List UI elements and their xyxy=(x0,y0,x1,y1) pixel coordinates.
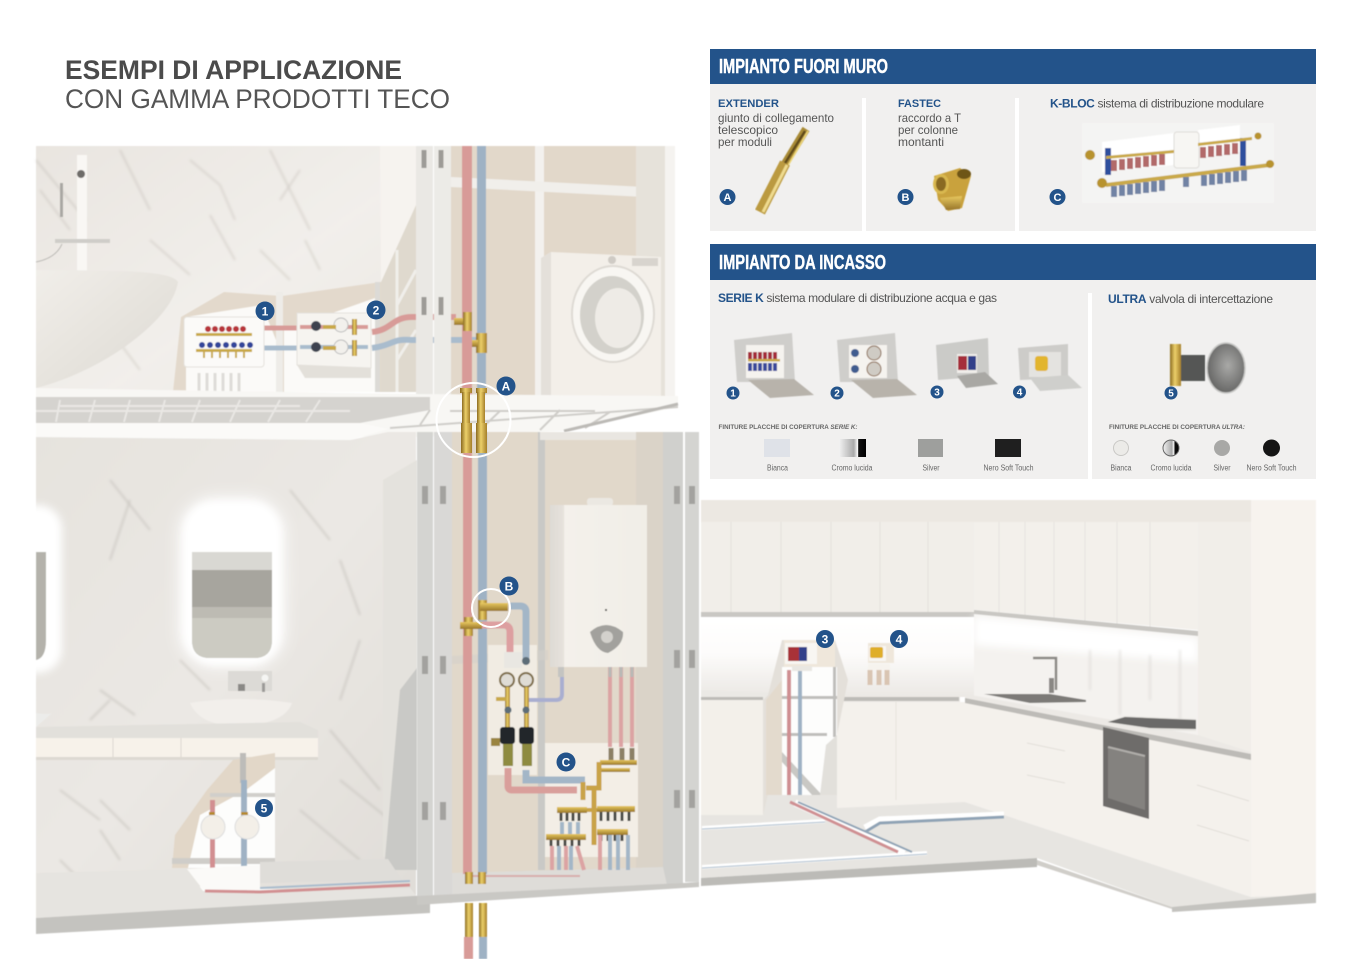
finishes ultra: Cromo lucida xyxy=(1150,464,1192,472)
hob xyxy=(1106,716,1196,731)
panel: impianto da incasso xyxy=(710,244,1316,479)
finishes ultra: Silver xyxy=(1214,464,1231,472)
upper cabinets right xyxy=(974,522,1198,630)
metal studs and panel xyxy=(417,432,699,903)
illustration: central technical wall xyxy=(417,432,699,959)
backlit mirror xyxy=(180,498,284,666)
badge 4 xyxy=(890,630,908,648)
finishes serie K: Silver xyxy=(922,464,940,472)
product: serie K box 1 xyxy=(734,333,814,398)
badge C xyxy=(556,752,576,772)
extender text xyxy=(718,98,834,149)
product: serie K box 2 xyxy=(837,333,917,398)
box 2 meters xyxy=(297,313,371,378)
extender text: telescopico xyxy=(718,123,778,137)
product: ultra valve xyxy=(1170,343,1245,393)
second mirror edge xyxy=(6,505,62,673)
pipes to box 2 xyxy=(372,317,476,348)
fastec text: montanti xyxy=(898,135,944,149)
badge 1: 1 xyxy=(262,304,269,318)
K-bloc manifolds xyxy=(546,748,637,870)
badge 5: 5 xyxy=(261,802,268,816)
badge 1 xyxy=(726,386,740,400)
badge C: C xyxy=(1054,192,1062,204)
badge B xyxy=(500,576,518,596)
finishes serie K: Cromo lucida xyxy=(832,464,873,472)
product: serie K box 3 xyxy=(936,338,998,388)
badge 2: 2 xyxy=(373,304,380,318)
risers upper xyxy=(462,146,486,396)
badge A xyxy=(720,189,736,205)
badge 3: 3 xyxy=(934,388,940,398)
badge 5: 5 xyxy=(1168,388,1174,400)
fastec text: FASTEC xyxy=(898,98,941,110)
countertop xyxy=(701,690,1251,760)
k-bloc text: K-BLOC sistema di distribuzione modulare xyxy=(1050,96,1264,110)
title xyxy=(65,55,450,114)
mortar patches xyxy=(488,645,638,857)
badge 2: 2 xyxy=(834,388,840,400)
panel: impianto fuori muro xyxy=(710,49,1316,231)
badge 2 xyxy=(830,386,844,400)
finishes serie K: Bianca xyxy=(767,464,788,472)
badge A: A xyxy=(502,380,511,394)
vanity shelf and basin xyxy=(36,699,318,760)
fastec text: raccordo a T xyxy=(898,111,962,125)
backsplash with under-cabinet light xyxy=(701,610,1198,735)
side wall and cut-away opening xyxy=(173,146,416,392)
badge 2 xyxy=(366,300,386,320)
badges on the illustration xyxy=(255,300,908,817)
finishes ultra: Nero Soft Touch xyxy=(1246,464,1296,472)
badge 1 xyxy=(256,302,274,320)
panel body xyxy=(710,280,1316,479)
kitchen floor xyxy=(701,795,1316,912)
intermediate floor slab xyxy=(36,388,678,440)
upper washbasin xyxy=(36,270,178,388)
badge 5 xyxy=(1164,386,1178,400)
title: ESEMPI DI APPLICAZIONE xyxy=(65,55,402,85)
highlight ring B xyxy=(472,589,510,627)
badge C: C xyxy=(562,756,571,770)
shower column xyxy=(36,155,110,271)
badge 3 xyxy=(816,630,834,648)
finishes serie K xyxy=(718,424,1034,472)
badge 4 xyxy=(1013,386,1026,398)
wash basin tap xyxy=(228,671,272,692)
fittings on risers xyxy=(454,312,487,353)
boiler xyxy=(550,498,647,677)
cut-away with valves 5 xyxy=(172,753,275,892)
badge B xyxy=(898,189,914,205)
fastec text xyxy=(898,98,962,149)
fastec text: per colonne xyxy=(898,123,958,137)
badge 3: 3 xyxy=(822,632,829,646)
kitchen cut-away xyxy=(763,640,848,815)
ultra heading: ULTRA valvola di intercettazione xyxy=(1108,292,1273,306)
finishes serie K: Nero Soft Touch xyxy=(984,464,1034,472)
upper metal studs xyxy=(416,146,451,396)
extender text: giunto di collegamento xyxy=(718,111,834,125)
illustration: upper bathroom with technical wall xyxy=(36,146,678,440)
panel header xyxy=(710,49,1316,84)
badge B: B xyxy=(505,580,514,594)
riser pipes xyxy=(463,432,487,959)
base cabinets xyxy=(701,700,1251,897)
finishes ultra: FINITURE PLACCHE DI COPERTURA ULTRA: xyxy=(1109,424,1245,431)
finishes serie K: FINITURE PLACCHE DI COPERTURA SERIE K: xyxy=(718,424,858,431)
highlight ring A xyxy=(436,383,510,457)
illustration: kitchen xyxy=(701,500,1316,912)
badge A: A xyxy=(724,192,732,204)
finishes ultra: Bianca xyxy=(1110,464,1132,472)
badge 3 xyxy=(930,386,944,398)
kitchen soffit xyxy=(701,500,1251,522)
icon: extender joint xyxy=(760,129,808,212)
upper bathroom marble wall xyxy=(36,146,381,392)
badge 4: 4 xyxy=(896,632,903,646)
lower bathroom floor xyxy=(36,859,430,934)
badge B: B xyxy=(902,192,910,204)
fastec fitting on riser xyxy=(460,600,508,636)
box 1 manifold xyxy=(184,317,264,367)
serie k heading: SERIE K sistema modulare di distribuzione acqua e gas xyxy=(718,291,997,305)
badge A xyxy=(496,376,516,396)
illustration: lower bathroom xyxy=(6,432,430,934)
right end panel xyxy=(1251,500,1316,897)
badge 1: 1 xyxy=(730,388,736,400)
icon: fastec T fitting xyxy=(933,168,971,211)
water lines xyxy=(482,606,632,790)
panel header: IMPIANTO FUORI MURO xyxy=(719,56,888,78)
tall unit xyxy=(1198,522,1251,752)
panel header: IMPIANTO DA INCASSO xyxy=(719,252,886,274)
panel header xyxy=(710,244,1316,280)
badge C xyxy=(1050,189,1066,205)
meters and filters xyxy=(491,652,534,766)
washing machine xyxy=(541,252,661,398)
extender text: per moduli xyxy=(718,135,772,149)
title: CON GAMMA PRODOTTI TECO xyxy=(65,84,450,114)
upper cabinets left xyxy=(701,522,974,617)
finishes ultra xyxy=(1109,424,1296,472)
floor of central section xyxy=(417,867,699,905)
lower bathroom marble wall xyxy=(36,432,417,895)
extender text: EXTENDER xyxy=(718,98,779,110)
box 4 gas xyxy=(868,643,894,685)
panel body xyxy=(710,84,1316,231)
icon: k-bloc manifold xyxy=(1082,123,1274,203)
product: serie K box 4 xyxy=(1018,344,1082,391)
badge 5 xyxy=(255,799,273,817)
upper wall tan panel and frame xyxy=(451,146,675,398)
oven xyxy=(1103,727,1149,819)
badge 4: 4 xyxy=(1017,388,1023,398)
sink and tap xyxy=(984,658,1086,703)
